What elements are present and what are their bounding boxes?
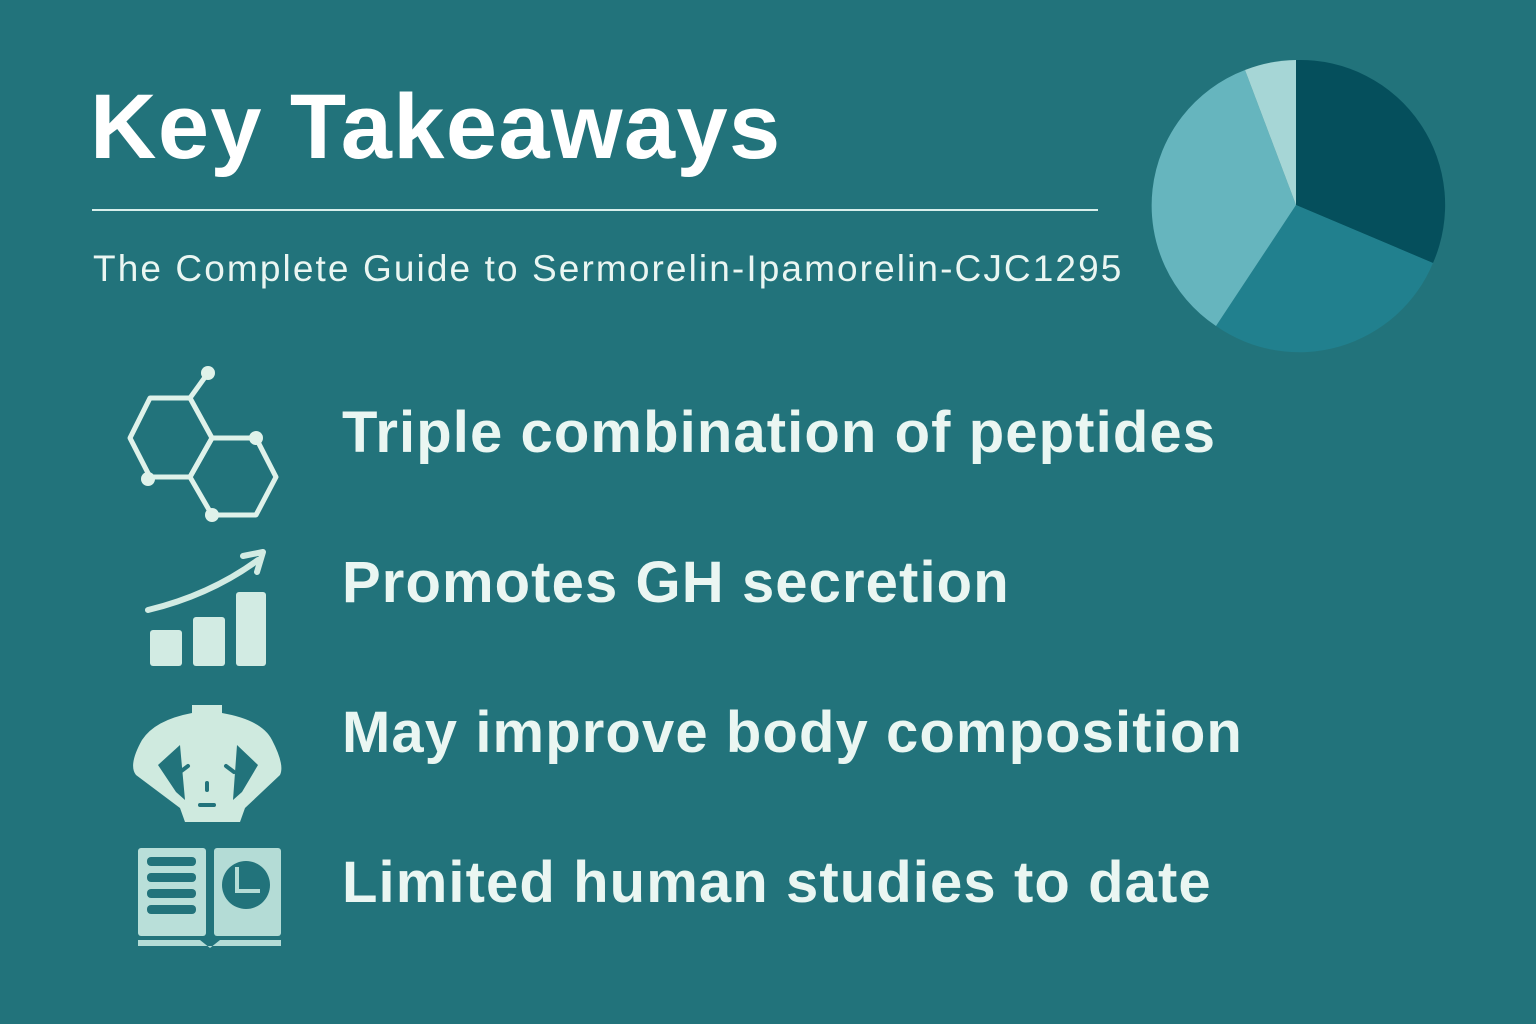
icon: body xyxy=(133,705,282,822)
title: Key Takeaways xyxy=(90,76,782,178)
item 1 text: Triple combination of peptides xyxy=(342,400,1216,465)
icon: book with clock xyxy=(138,848,281,948)
icon: growth chart xyxy=(145,549,266,666)
icon: molecule xyxy=(128,366,278,522)
subtitle: The Complete Guide to Sermorelin-Ipamorelin-CJC1295 xyxy=(93,248,1123,289)
item 2 text: Promotes GH secretion xyxy=(342,550,1010,615)
item 4 text: Limited human studies to date xyxy=(342,850,1212,915)
item 3 text: May improve body composition xyxy=(342,700,1243,765)
pie chart xyxy=(1152,60,1446,352)
divider xyxy=(92,209,1098,211)
